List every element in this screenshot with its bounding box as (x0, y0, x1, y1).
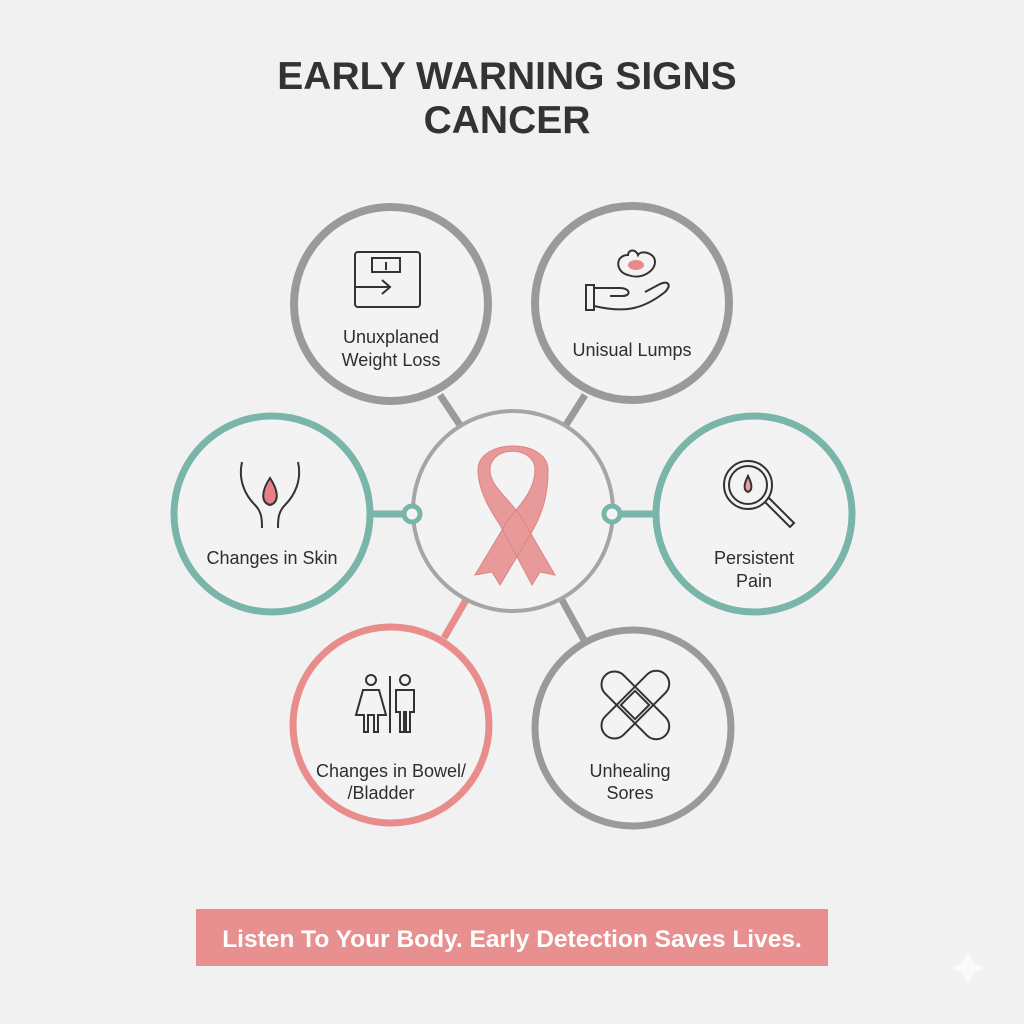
icon: pink ribbon (475, 446, 555, 585)
connector rings (404, 506, 620, 522)
panel: weight loss: Unuxplaned (343, 327, 439, 347)
icon: sparkle (948, 948, 988, 988)
panel: sores: Sores (606, 783, 654, 803)
panel: bowel bladder: /Bladder (347, 783, 415, 803)
banner: Listen To Your Body. Early Detection Saves Lives. (222, 926, 802, 953)
title: EARLY WARNING SIGNS (277, 55, 737, 98)
panel: pain: Pain (736, 571, 772, 591)
title: CANCER (424, 99, 590, 142)
panel: sores (535, 630, 731, 826)
panel: sores: Unhealing (589, 761, 671, 781)
connectors (368, 395, 658, 640)
panel: lumps (535, 206, 729, 400)
panel: bowel bladder (293, 627, 489, 823)
panel: skin: Changes in Skin (206, 548, 338, 568)
banner (196, 909, 828, 966)
panel: weight loss (294, 207, 488, 401)
panel: lumps: Unisual Lumps (572, 340, 692, 360)
panel: bowel bladder: Changes in Bowel/ (316, 761, 466, 781)
panel: pain: Persistent (714, 548, 794, 568)
center circle with ribbon (413, 411, 613, 611)
title (277, 55, 737, 142)
panel: weight loss: Weight Loss (342, 350, 440, 370)
panel: skin (174, 416, 370, 612)
panel: pain (656, 416, 852, 612)
